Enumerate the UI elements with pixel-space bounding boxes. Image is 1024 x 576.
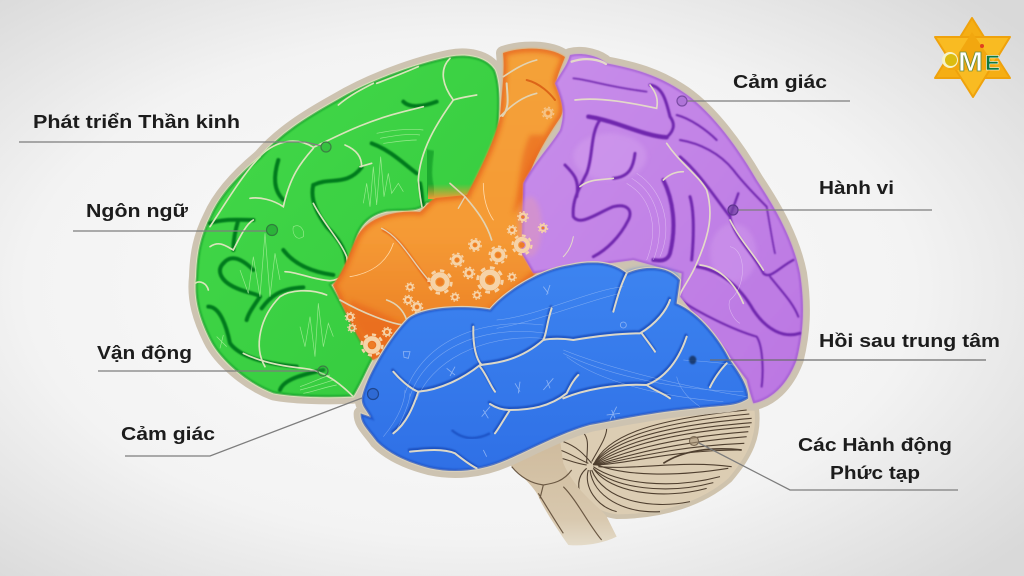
label: Các Hành động Phức tạp: Các Hành động <box>798 434 952 455</box>
blue-purple blend <box>622 268 678 288</box>
logo: OME gold star: M <box>958 46 983 77</box>
label: Hành vi: Hành vi <box>819 177 894 198</box>
label: Hành vi <box>728 177 932 215</box>
frontal lobe: green <box>195 55 500 397</box>
occipital lobe: purple <box>518 54 803 403</box>
gears <box>345 107 554 355</box>
label: Ngôn ngữ <box>73 200 278 236</box>
logo: OME gold star <box>935 18 1010 97</box>
dark pit at the postcentral point <box>689 356 696 364</box>
brain stem <box>508 439 617 545</box>
label: Cảm giác (right): Cảm giác <box>733 71 827 92</box>
label: Các Hành động Phức tạp: Phức tạp <box>830 462 920 483</box>
label: Cảm giác (left) <box>121 388 378 456</box>
label: Các Hành động Phức tạp <box>690 434 958 490</box>
label: Vận động: Vận động <box>97 342 192 363</box>
label: Phát triển Thần kinh <box>19 111 331 152</box>
label: Hồi sau trung tâm: Hồi sau trung tâm <box>819 330 1000 351</box>
temporal lobe: blue <box>361 262 748 471</box>
label: Cảm giác (left): Cảm giác <box>121 423 215 444</box>
tan outline around the cerebrum <box>195 49 803 471</box>
label: Cảm giác (right) <box>677 71 850 106</box>
brain illustration <box>195 49 803 545</box>
purple-orange blend <box>518 197 542 257</box>
label: Phát triển Thần kinh: Phát triển Thần kinh <box>33 111 240 132</box>
label: Vận động <box>97 342 328 376</box>
parietal lobe: orange <box>333 49 565 360</box>
green-orange blend <box>428 184 472 199</box>
logo: OME gold star: E <box>985 52 1000 75</box>
label: Ngôn ngữ: Ngôn ngữ <box>86 200 189 221</box>
cerebellum <box>557 408 757 517</box>
